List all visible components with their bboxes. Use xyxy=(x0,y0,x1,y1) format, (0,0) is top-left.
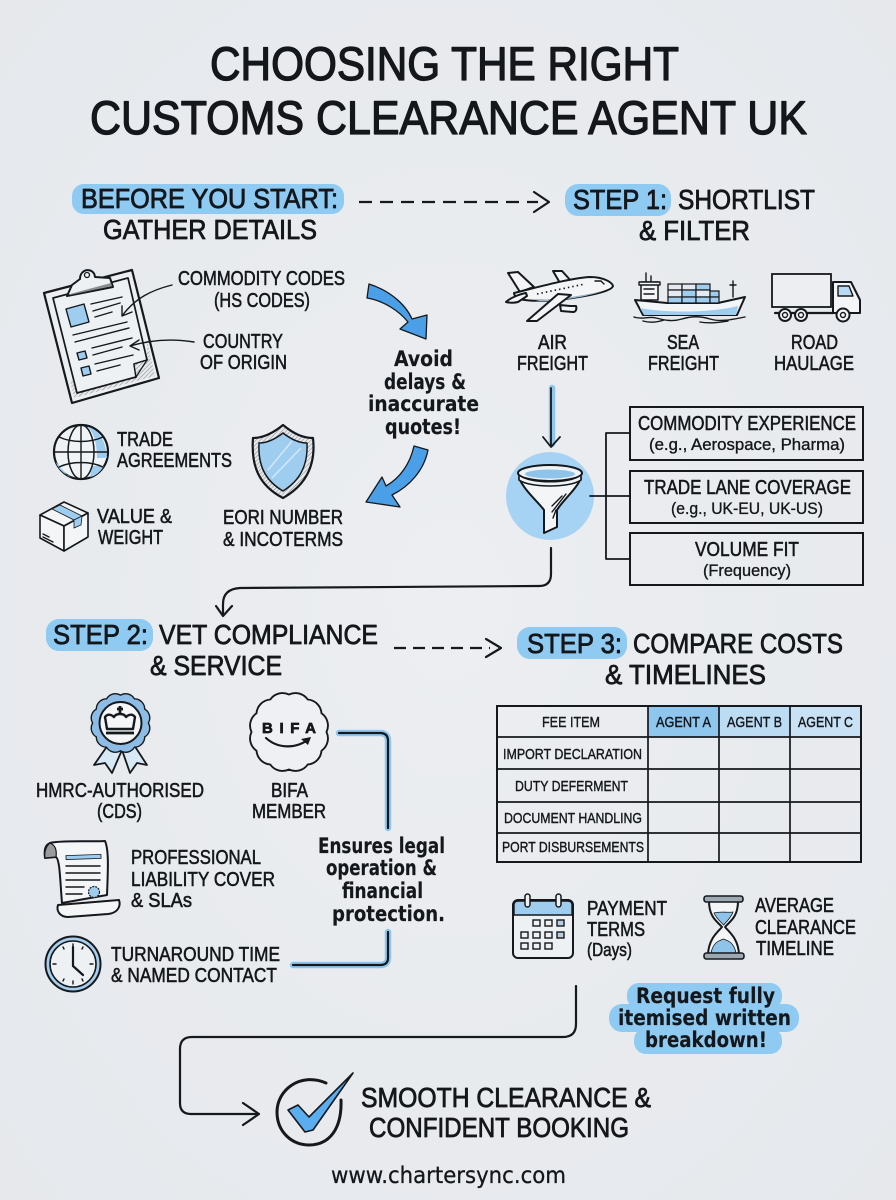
label: road haulage: ROAD xyxy=(791,332,838,354)
callout text: ensures legal operation: operation & xyxy=(326,856,437,880)
label: payment terms: TERMS xyxy=(587,919,645,941)
text: smooth clearance xyxy=(361,1082,651,1143)
icon: container ship xyxy=(634,273,745,323)
table: fee comparison: IMPORT DECLARATION xyxy=(503,746,642,763)
callout text: avoid delays: delays & xyxy=(384,370,466,394)
label: average clearance timeline xyxy=(755,895,856,960)
icon: clock xyxy=(46,936,100,992)
heading: step 3: STEP 3: xyxy=(527,628,622,659)
callout text: avoid delays: Avoid xyxy=(394,347,453,371)
title xyxy=(90,37,807,144)
label: commodity codes xyxy=(178,268,345,312)
heading: before you start: GATHER DETAILS xyxy=(103,214,317,245)
table: fee comparison: PORT DISBURSEMENTS xyxy=(502,839,644,856)
callout text: ensures legal operation: financial xyxy=(342,879,423,903)
label: value and weight: VALUE & xyxy=(97,506,173,528)
title: CHOOSING THE RIGHT xyxy=(210,37,679,90)
icon: clipboard xyxy=(44,270,159,403)
bracket: bottom xyxy=(293,932,388,965)
panel: step 1 xyxy=(506,184,863,585)
icon: scroll xyxy=(45,841,120,917)
icon: HMRC rosette xyxy=(91,694,150,773)
icon: hourglass xyxy=(704,896,744,959)
label: professional liability: PROFESSIONAL xyxy=(131,847,261,869)
label: country of origin xyxy=(200,331,287,374)
label: payment terms: PAYMENT xyxy=(587,898,667,920)
label: air freight xyxy=(517,332,588,375)
label: trade agreements: AGREEMENTS xyxy=(117,450,232,472)
label: value and weight: WEIGHT xyxy=(98,527,163,549)
icon: calendar xyxy=(513,894,573,958)
table: fee comparison: DOCUMENT HANDLING xyxy=(504,810,642,827)
box: trade lane coverage: (e.g., UK-EU, UK-US) xyxy=(671,499,823,518)
text: smooth clearance: CONFIDENT BOOKING xyxy=(369,1112,629,1143)
icon: BIFA badge: BIFA xyxy=(262,720,316,737)
heading: step 2 xyxy=(46,619,378,681)
connector: funnel to criteria xyxy=(590,433,630,559)
callout text: avoid delays: quotes! xyxy=(385,415,461,439)
label: sea freight: SEA xyxy=(667,332,700,354)
label: eori number and incoterms: EORI NUMBER xyxy=(223,507,343,529)
callout text: ensures legal operation xyxy=(318,834,445,926)
panel: before you start xyxy=(40,183,479,551)
callout: request breakdown: Request fully xyxy=(636,984,775,1008)
label: average clearance timeline: TIMELINE xyxy=(756,938,834,960)
icon: BIFA badge xyxy=(250,693,328,771)
box: volume fit xyxy=(630,533,863,585)
callout: request breakdown xyxy=(609,983,799,1054)
label: commodity codes: COMMODITY CODES xyxy=(178,268,345,290)
arrow: curved blue down xyxy=(367,284,427,339)
callout text: avoid delays xyxy=(368,347,479,439)
label: road haulage: HAULAGE xyxy=(774,353,854,375)
heading: step 3 xyxy=(517,627,843,690)
label: sea freight: FREIGHT xyxy=(648,353,719,375)
box: trade lane coverage: TRADE LANE COVERAGE xyxy=(644,477,851,499)
table: fee comparison: AGENT A xyxy=(656,714,711,731)
label: eori number and incoterms: & INCOTERMS xyxy=(223,529,343,551)
label: turnaround time xyxy=(111,944,280,987)
arrow: step 1 to step 2 xyxy=(216,548,551,616)
icon: plane xyxy=(506,271,613,321)
callout: request breakdown: itemised written xyxy=(618,1006,791,1030)
heading: step 2: VET COMPLIANCE xyxy=(159,619,378,650)
label: hmrc authorised xyxy=(36,780,204,823)
box: commodity experience: COMMODITY EXPERIENCE xyxy=(638,413,856,435)
callout arrow: commodity codes xyxy=(122,285,172,316)
footer url: www.chartersync.com xyxy=(331,1163,566,1189)
table: fee comparison: FEE ITEM xyxy=(542,714,600,731)
table: fee comparison: AGENT C xyxy=(798,714,853,731)
callout text: ensures legal operation: protection. xyxy=(332,902,445,926)
heading: step 2: STEP 2: xyxy=(53,619,148,650)
heading: before you start xyxy=(72,183,344,245)
title: CUSTOMS CLEARANCE AGENT UK xyxy=(90,91,807,144)
label: sea freight xyxy=(648,332,719,375)
box: trade lane coverage xyxy=(630,471,863,523)
box: volume fit: VOLUME FIT xyxy=(695,539,799,561)
heading: step 3: & TIMELINES xyxy=(605,659,766,690)
icon: globe xyxy=(54,425,108,479)
label: average clearance timeline: CLEARANCE xyxy=(755,917,856,939)
label: air freight: FREIGHT xyxy=(517,353,588,375)
callout text: avoid delays: inaccurate xyxy=(368,392,479,416)
icon: truck xyxy=(772,274,860,322)
label: turnaround time: & NAMED CONTACT xyxy=(111,965,277,987)
label: bifa member: MEMBER xyxy=(252,801,326,823)
panel: step 3 xyxy=(497,627,861,1054)
dashed arrow: to step 3 xyxy=(394,639,501,657)
label: professional liability: LIABILITY COVER xyxy=(131,869,275,891)
icon: parcel box xyxy=(40,502,88,551)
outcome: smooth clearance xyxy=(277,1073,651,1145)
box: commodity experience xyxy=(630,407,863,460)
text: smooth clearance: SMOOTH CLEARANCE & xyxy=(361,1082,651,1113)
heading: step 3: COMPARE COSTS xyxy=(633,628,843,659)
arrow: curved blue left xyxy=(366,446,428,507)
arrow: step 3 to outcome xyxy=(180,986,576,1125)
heading: step 1: SHORTLIST xyxy=(678,184,815,215)
label: trade agreements xyxy=(117,429,232,472)
panel: step 2 xyxy=(36,619,445,992)
label: trade agreements: TRADE xyxy=(117,429,173,451)
icon: funnel xyxy=(506,452,594,540)
label: turnaround time: TURNAROUND TIME xyxy=(111,944,280,966)
box: volume fit: (Frequency) xyxy=(703,561,791,580)
callout: request breakdown: breakdown! xyxy=(645,1028,767,1052)
label: payment terms xyxy=(587,898,667,960)
callout text: ensures legal operation: Ensures legal xyxy=(318,834,445,858)
bracket: top xyxy=(339,733,388,828)
label: bifa member: BIFA xyxy=(271,780,309,802)
label: hmrc authorised: (CDS) xyxy=(97,801,142,823)
heading: before you start: BEFORE YOU START: xyxy=(81,183,338,214)
label: air freight: AIR xyxy=(538,332,567,354)
label: eori number and incoterms xyxy=(223,507,343,551)
icon: check mark xyxy=(277,1073,353,1145)
callout arrow: country of origin xyxy=(130,340,194,350)
heading: step 2: & SERVICE xyxy=(150,650,282,681)
label: hmrc authorised: HMRC-AUTHORISED xyxy=(36,780,204,802)
icon: shield xyxy=(253,425,314,498)
table: fee comparison: DUTY DEFERMENT xyxy=(515,778,628,795)
label: bifa member xyxy=(252,780,326,823)
box: commodity experience: (e.g., Aerospace, Pharma) xyxy=(649,435,845,454)
label: professional liability xyxy=(131,847,275,912)
heading: step 1: & FILTER xyxy=(639,215,750,246)
label: commodity codes: (HS CODES) xyxy=(214,290,310,312)
label: value and weight xyxy=(97,506,173,549)
label: payment terms: (Days) xyxy=(587,940,632,960)
arrow: modes into funnel xyxy=(543,388,560,447)
label: average clearance timeline: AVERAGE xyxy=(755,895,834,917)
label: road haulage xyxy=(774,332,854,375)
label: professional liability: & SLAs xyxy=(131,890,192,912)
heading: step 1: STEP 1: xyxy=(573,184,667,215)
heading: step 1 xyxy=(565,184,815,246)
table: fee comparison xyxy=(497,706,861,862)
table: fee comparison: AGENT B xyxy=(727,714,782,731)
dashed arrow: to step 1 xyxy=(359,192,549,212)
label: country of origin: OF ORIGIN xyxy=(200,352,287,374)
label: country of origin: COUNTRY xyxy=(203,331,283,353)
